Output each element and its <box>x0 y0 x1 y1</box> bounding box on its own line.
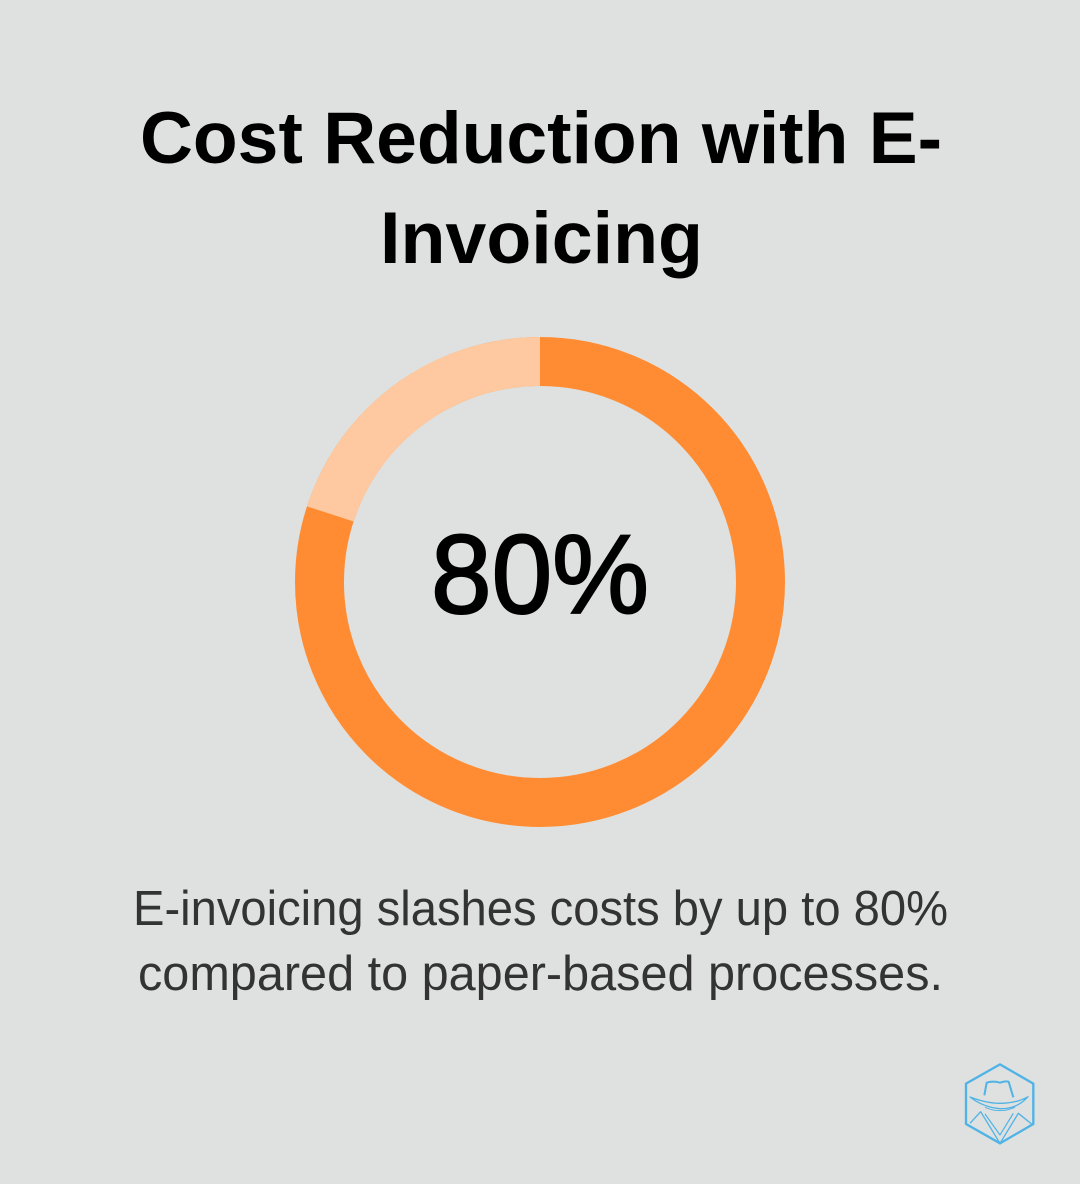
donut value: 80% <box>431 512 649 637</box>
description text: E-invoicing slashes costs by up to 80% <box>133 882 948 936</box>
title <box>140 98 942 279</box>
donut chart: 80% <box>320 362 760 802</box>
description text <box>133 882 948 1001</box>
description text: compared to paper-based processes. <box>138 947 943 1001</box>
icon: hexagon logo with hat <box>966 1064 1033 1143</box>
title: Cost Reduction with E- <box>140 98 942 179</box>
title: Invoicing <box>380 198 703 279</box>
